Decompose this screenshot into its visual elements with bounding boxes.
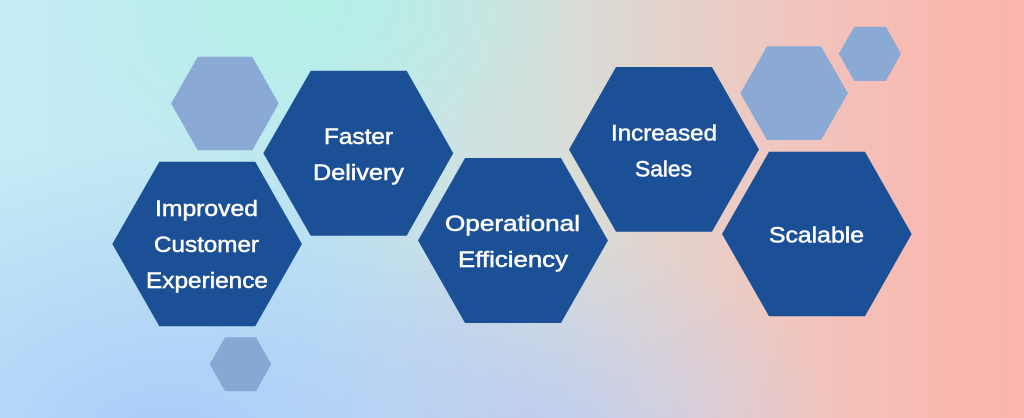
- label: Improved Customer Experience: Customer: [154, 232, 260, 257]
- label: Faster Delivery: Faster: [324, 124, 394, 149]
- decorative hexagon: upper right large: [740, 46, 848, 140]
- label: Increased Sales: [611, 120, 717, 182]
- label: Improved Customer Experience: [146, 196, 268, 293]
- decorative hexagon: upper left: [171, 57, 279, 150]
- label: Increased Sales: Increased: [611, 120, 717, 146]
- hexagon: Faster Delivery: [263, 71, 453, 236]
- label: Faster Delivery: [313, 124, 405, 185]
- label: Increased Sales: Sales: [635, 156, 692, 182]
- hexagon: Operational Efficiency: [418, 158, 608, 323]
- label: Improved Customer Experience: Experience: [146, 268, 268, 293]
- decorative hexagon: upper right small: [839, 27, 901, 81]
- label: Faster Delivery: Delivery: [313, 160, 405, 185]
- hexagon: Scalable: [722, 152, 912, 316]
- label: Operational Efficiency: [445, 211, 580, 272]
- label: Operational Efficiency: Efficiency: [458, 247, 569, 272]
- label: Operational Efficiency: Operational: [445, 211, 580, 236]
- label: Improved Customer Experience: Improved: [155, 196, 258, 221]
- hexagon: Improved Customer Experience: [112, 162, 302, 326]
- label: Scalable: Scalable: [769, 222, 864, 248]
- hexagon: Increased Sales: [569, 67, 759, 232]
- decorative hexagon: lower left: [210, 337, 271, 391]
